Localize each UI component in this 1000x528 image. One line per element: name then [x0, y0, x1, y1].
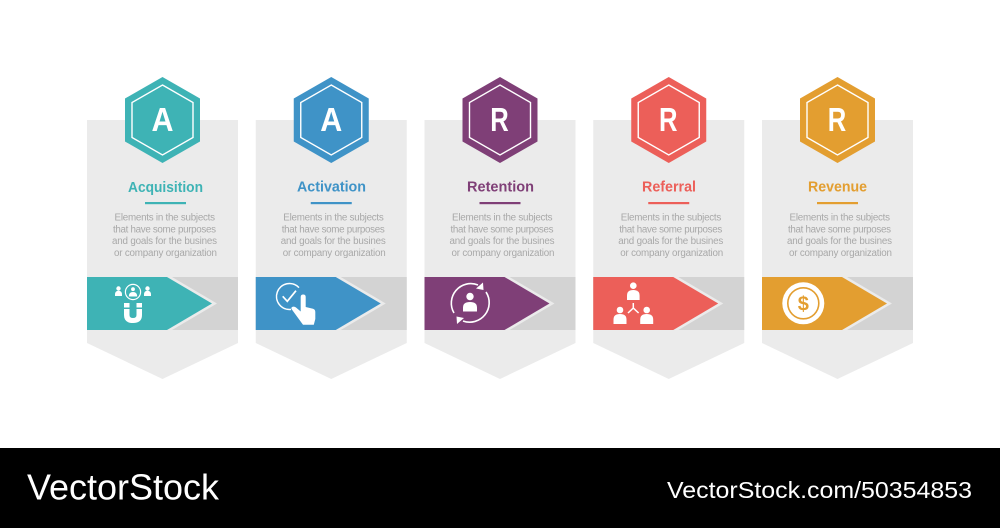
ribbon band: [762, 277, 913, 330]
icon: tap check: [277, 283, 315, 325]
arrow outline: [424, 277, 554, 330]
arrow: [87, 277, 212, 330]
panel: Activation: [256, 77, 407, 379]
description: and goals for the busines: [112, 236, 217, 247]
panel background: [87, 120, 238, 379]
description: [450, 212, 555, 259]
description: Elements in the subjects: [790, 212, 890, 224]
icon: dollar coin: [782, 282, 824, 324]
heading: Revenue: [808, 180, 867, 196]
description: Elements in the subjects: [115, 212, 215, 224]
hexagon badge: A: [320, 101, 342, 138]
panel: Acquisition: [87, 77, 238, 379]
hexagon badge: R: [659, 101, 678, 138]
arrow: [256, 277, 381, 330]
description: that have some purposes: [113, 224, 216, 235]
heading: Activation: [297, 180, 366, 196]
panel background: [762, 120, 913, 379]
ribbon band: [256, 277, 407, 330]
icon: referral network: [614, 282, 653, 324]
panel background: [593, 120, 744, 379]
panel: Referral: [593, 77, 744, 379]
arrow outline: [87, 277, 217, 330]
panel: Retention: [424, 77, 576, 379]
description: [112, 212, 217, 259]
heading underline: [311, 202, 352, 204]
description: or company organization: [114, 248, 217, 259]
description: [787, 212, 892, 259]
description: or company organization: [452, 248, 554, 259]
panel: Revenue: [762, 77, 913, 379]
description: and goals for the busines: [450, 236, 555, 247]
icon: people and magnet: [115, 284, 151, 323]
footer logo text: VectorStock: [27, 466, 220, 508]
description: and goals for the busines: [787, 236, 892, 247]
icon: dollar coin: $: [798, 294, 809, 316]
ribbon band: [593, 277, 744, 330]
description: that have some purposes: [619, 224, 722, 235]
heading underline: [145, 202, 186, 204]
hexagon badge: [800, 77, 875, 163]
description: or company organization: [283, 248, 386, 259]
hexagon badge: A: [152, 101, 174, 138]
description: Elements in the subjects: [621, 212, 721, 224]
arrow: [762, 277, 887, 330]
description: or company organization: [789, 248, 892, 259]
heading underline: [817, 202, 858, 204]
description: and goals for the busines: [618, 236, 723, 247]
description: Elements in the subjects: [452, 212, 553, 224]
panel background: [256, 120, 407, 379]
heading underline: [480, 202, 520, 204]
arrow: [593, 277, 718, 330]
panel background: [424, 120, 576, 379]
description: [618, 212, 723, 259]
description: that have some purposes: [282, 224, 385, 235]
description: that have some purposes: [450, 224, 554, 235]
hexagon badge: [125, 77, 200, 163]
footer bar: [0, 448, 1000, 528]
arrow: [424, 277, 550, 330]
ribbon band: [87, 277, 238, 330]
description: Elements in the subjects: [283, 212, 384, 224]
heading: Retention: [467, 180, 534, 196]
description: [281, 212, 386, 259]
arrow outline: [762, 277, 892, 330]
hexagon badge: R: [828, 101, 846, 138]
arrow outline: [256, 277, 386, 330]
arrow outline: [593, 277, 723, 330]
hexagon badge: [294, 77, 369, 163]
description: and goals for the busines: [281, 236, 386, 247]
heading: Acquisition: [128, 180, 203, 196]
hexagon badge: R: [490, 101, 509, 138]
ribbon band: [424, 277, 576, 330]
heading: Referral: [642, 180, 696, 196]
heading underline: [648, 202, 689, 204]
description: or company organization: [620, 248, 723, 259]
hexagon badge: [631, 77, 706, 163]
description: that have some purposes: [788, 224, 891, 235]
hexagon badge: [462, 77, 538, 163]
footer image id: VectorStock.com/50354853: [667, 477, 972, 503]
icon: retention cycle: [451, 282, 489, 324]
